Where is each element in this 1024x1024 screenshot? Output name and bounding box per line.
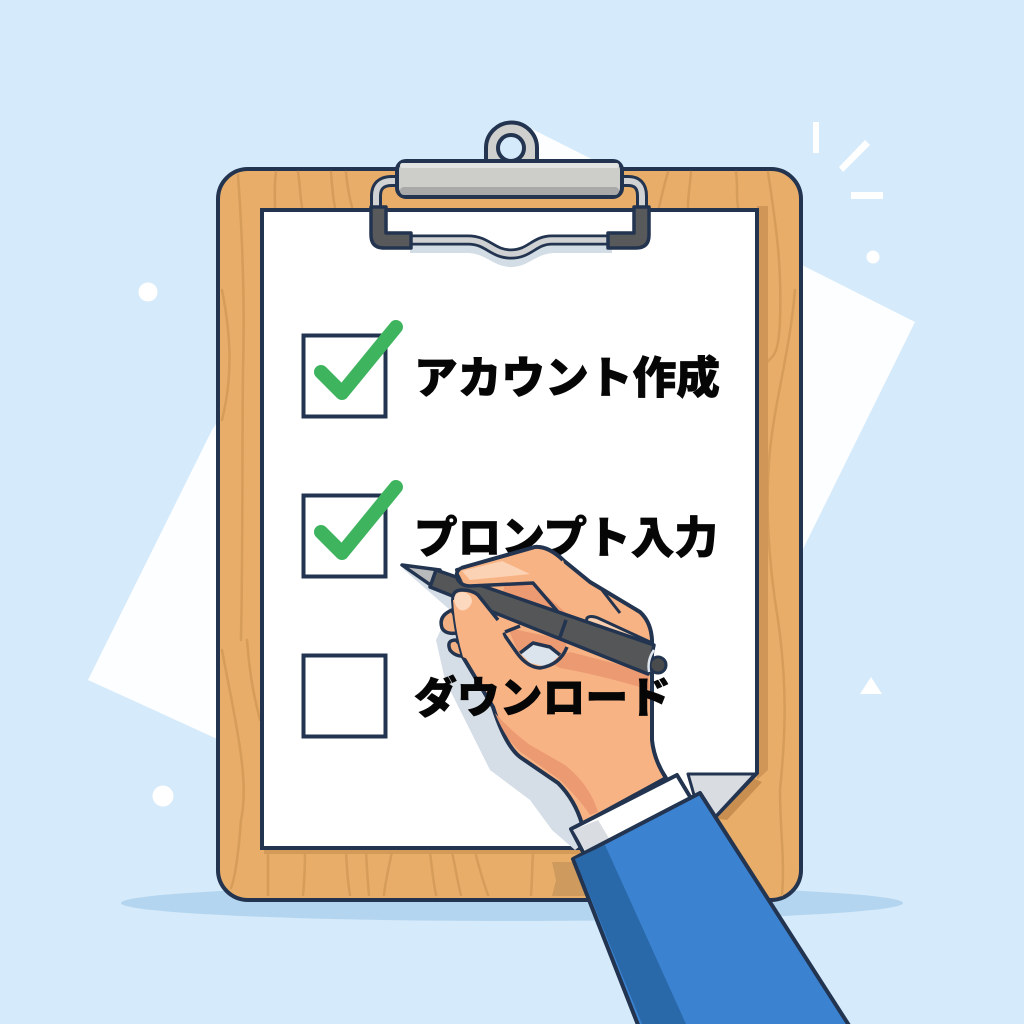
wood grain [222,172,795,895]
clipboard [218,169,801,900]
pen clip [585,616,650,650]
back sheet of white paper [88,128,915,760]
thumb tip [453,590,505,660]
clip grip left [371,207,411,248]
label: prompt input: プロンプト入力 [414,514,718,563]
hand shading [495,713,598,815]
clip bar [397,161,622,197]
pen [402,565,666,674]
ground shadow [121,885,903,921]
pen tip [402,565,440,586]
sleeve and cuff [571,775,852,1024]
clip wire [376,181,642,230]
checkbox 2 checked [304,487,396,576]
checkbox 1 checked [304,327,396,416]
blue sleeve [573,793,852,1024]
checkbox 3 empty [304,656,386,736]
finger crease [602,590,620,613]
paper sheet [262,210,757,848]
decorative sparkles [138,122,883,806]
shirt cuff [571,775,692,854]
paper shadow on wood [757,206,768,780]
index fingertip [457,547,570,586]
folded paper corner [688,774,755,816]
pen barrel [430,570,654,674]
label: account creation: アカウント作成 [414,353,720,403]
hand holding pen [402,547,666,850]
hand main [453,547,666,824]
clip wire shadow [410,248,612,262]
pen ring [559,620,566,640]
back fingers [441,610,470,656]
pen end cap [650,657,666,673]
inner finger outline [503,626,567,668]
clipboard board [218,169,801,900]
clip hanger tab [486,122,537,165]
gap between fingers [520,643,560,667]
sleeve shading [575,845,686,1024]
metal clip [371,122,649,262]
clip grip right [608,207,649,248]
label: download: ダウンロード [414,674,671,723]
hand shadow [402,568,600,850]
